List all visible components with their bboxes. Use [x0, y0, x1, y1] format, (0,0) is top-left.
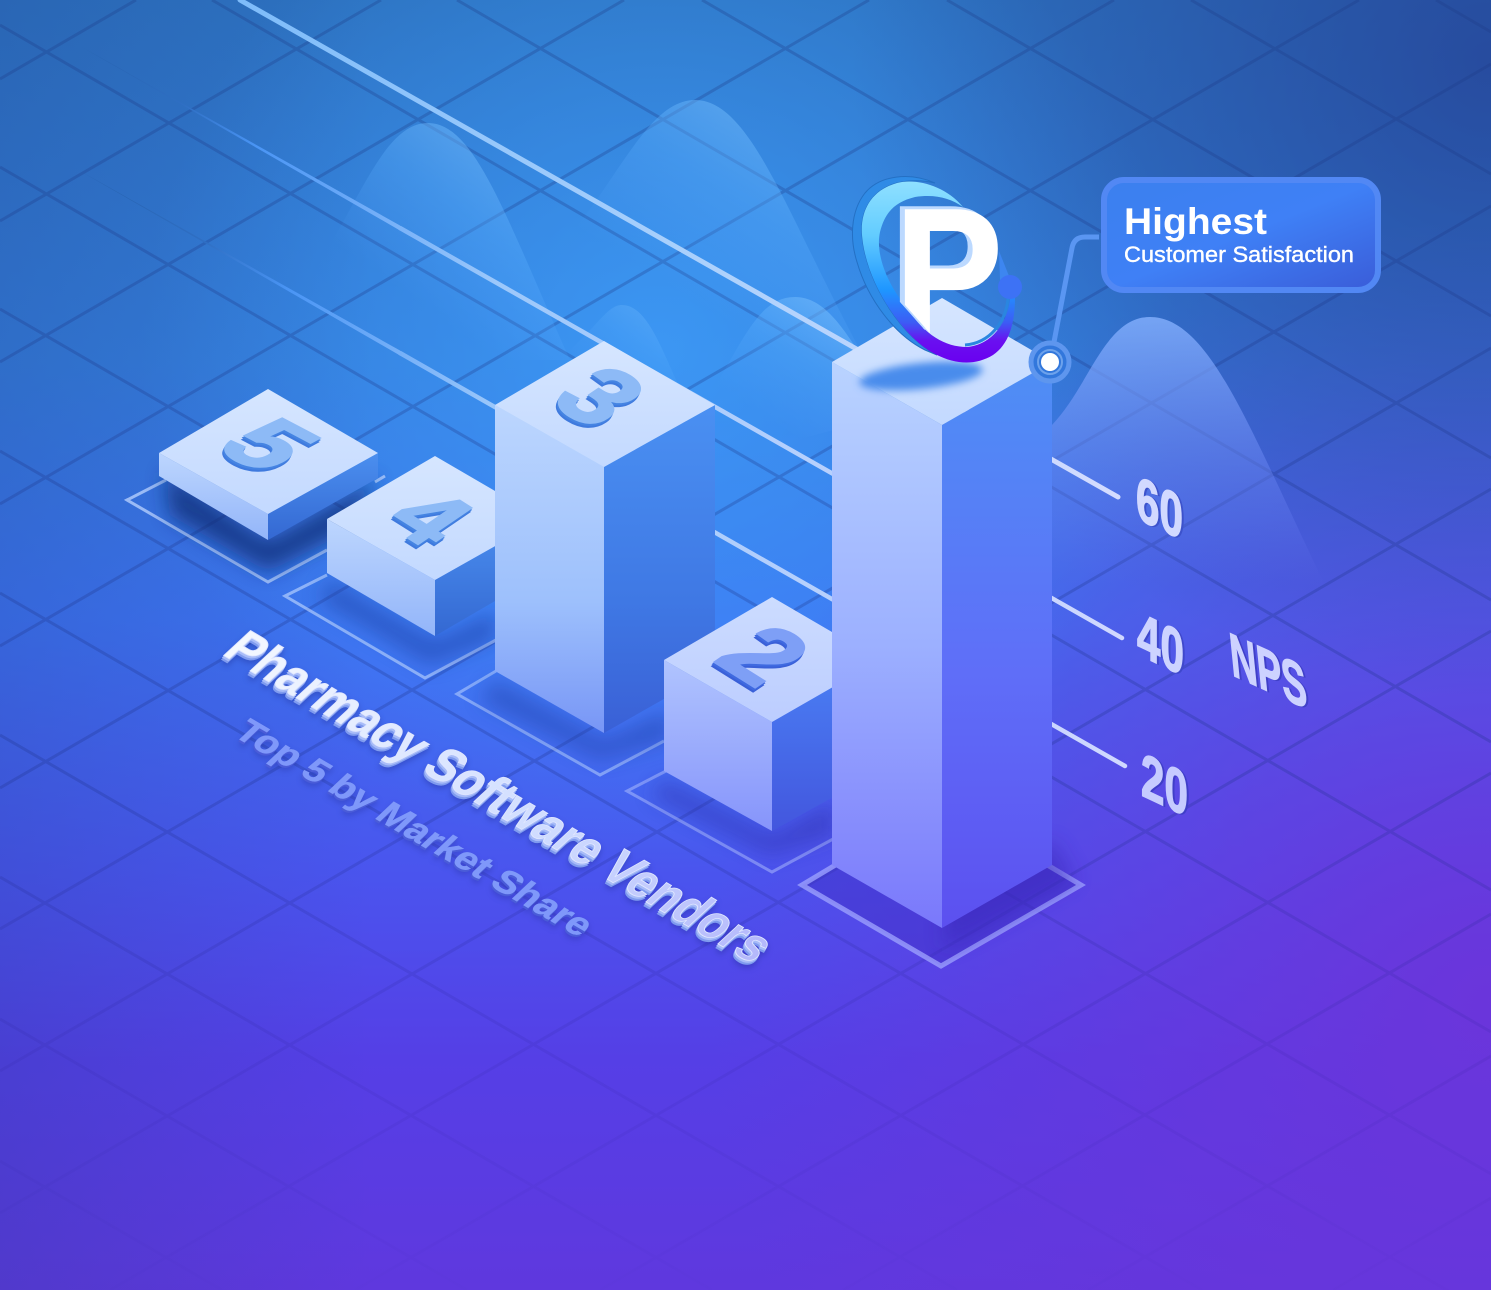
callout subheading: Customer Satisfaction [1124, 242, 1354, 267]
connector node [1031, 343, 1069, 381]
axis label 20: 20 [1141, 738, 1188, 831]
logo ring [862, 181, 1015, 363]
floor outline 2 [627, 771, 835, 872]
title: Pharmacy Software Vendors [212, 621, 788, 972]
floor outline top column [802, 802, 1081, 966]
floor shadow 3 [480, 680, 670, 760]
logo [852, 172, 1022, 370]
subtitle: Top 5 by Market Share [226, 712, 603, 943]
callout [1104, 180, 1378, 290]
floor shadow 5 [165, 470, 378, 572]
digit 3: 3 [529, 350, 670, 443]
axis line 60 [240, 0, 1118, 497]
axis label 60: 60 [1136, 461, 1183, 554]
callout heading: Highest [1124, 201, 1267, 242]
top column [832, 298, 1052, 928]
logo dot [998, 275, 1022, 299]
area chart hills [330, 100, 1325, 585]
axis line 20 [80, 171, 1125, 766]
floor shadow 4 [320, 580, 496, 665]
floor outline 3 [457, 671, 664, 775]
connector [1054, 237, 1099, 342]
logo letter P: P [895, 172, 1002, 370]
floor outline 5 [127, 476, 385, 582]
logo ring inner arc [965, 298, 1008, 345]
digit 2: 2 [693, 609, 834, 702]
logo spike [999, 251, 1009, 280]
digit 5: 5 [193, 404, 346, 485]
floor shadow 2 [650, 780, 835, 855]
digit 4: 4 [366, 474, 496, 560]
axis title NPS: NPS [1226, 620, 1310, 724]
block 5 [159, 389, 378, 540]
floor shadow top column [945, 840, 1075, 950]
axis label 40: 40 [1137, 597, 1184, 690]
logo shadow [858, 357, 984, 395]
axis line 40 [80, 46, 1122, 638]
block 4 [327, 456, 543, 636]
floor outline 4 [285, 575, 496, 678]
block 3 [495, 341, 715, 733]
block 2 [664, 597, 880, 831]
logo ring outer band [852, 177, 937, 355]
